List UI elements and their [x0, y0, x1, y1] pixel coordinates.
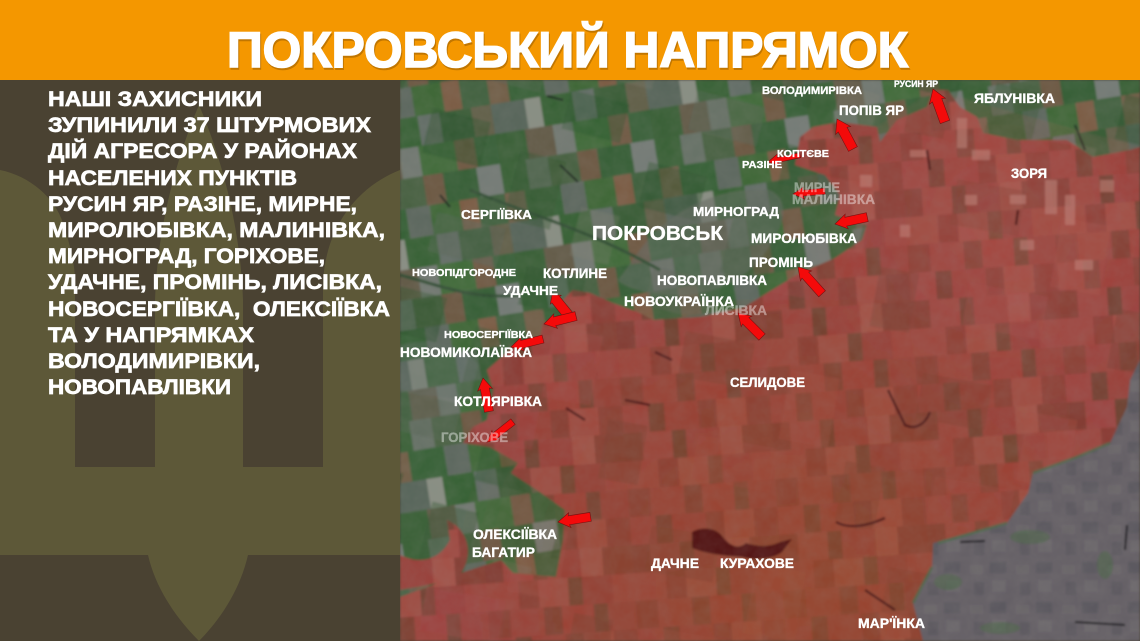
map: green fringe of urban area: [913, 443, 1110, 603]
map noise texture: [400, 80, 1140, 641]
text block: report: МИРОЛЮБІВКА, МАЛИНІВКА,: [48, 219, 385, 242]
map labels: settlements: НОВОПІДГОРОДНЕ: [412, 267, 516, 279]
map labels: settlements: РУСИН ЯР: [894, 79, 938, 89]
text block: report: РУСИН ЯР, РАЗІНЕ, МИРНЕ,: [48, 193, 357, 216]
map labels: settlements: ПОПІВ ЯР: [839, 103, 904, 118]
text block: report: ЗУПИНИЛИ 37 ШТУРМОВИХ: [48, 114, 371, 137]
map: Kurakhove reservoir: [692, 529, 792, 559]
left panel background: [0, 80, 400, 641]
arrow: Novoserhiivka: [509, 332, 545, 354]
arrow: Kotliarivka: [476, 377, 496, 413]
map labels: settlements: ДАЧНЕ: [651, 556, 699, 571]
map labels: settlements: НОВОПАВЛІВКА: [657, 273, 767, 288]
text block: report: НАШІ ЗАХИСНИКИ: [48, 88, 262, 111]
map labels: settlements: ПРОМІНЬ: [749, 255, 813, 270]
map labels: settlements: ЗОРЯ: [1011, 166, 1047, 181]
map: Pokrovsk urban area: [618, 189, 783, 296]
arrow: Myroliubivka: [833, 210, 869, 231]
map shade overlay: [400, 80, 1140, 641]
arrow: Rusyn Yar: [925, 86, 953, 125]
map: ravines in red zone: [566, 150, 1018, 610]
map labels: settlements: МИРНЕ: [794, 180, 840, 195]
arrow: Udachne: [547, 291, 574, 320]
text block: report: МИРНОГРАД, ГОРІХОВЕ,: [48, 245, 325, 268]
map labels: settlements: ЛИСІВКА: [705, 303, 767, 318]
icon: trident emblem: [0, 105, 400, 641]
map labels: settlements: КОТЛЯРІВКА: [454, 394, 542, 409]
map labels: settlements: КОПТЄВЕ: [777, 148, 829, 160]
map: occupied territory: [400, 90, 1140, 641]
map labels: settlements: КУРАХОВЕ: [720, 556, 794, 571]
map base: farmland: [400, 80, 1140, 641]
text block: report: НАСЕЛЕНИХ ПУНКТІВ: [48, 167, 297, 190]
map labels: settlements: СЕРГІЇВКА: [461, 207, 532, 222]
map labels: settlements: ЯБЛУНІВКА: [974, 91, 1055, 106]
map labels: settlements: ВОЛОДИМИРІВКА: [762, 85, 862, 97]
text block: report: [48, 88, 390, 399]
map labels: settlements: НОВОСЕРГІЇВКА: [444, 328, 533, 341]
map: ravines and roads: [400, 96, 1085, 296]
map labels: settlements: НОВОМИКОЛАЇВКА: [400, 345, 532, 360]
arrow: Myrne: [792, 185, 825, 200]
text block: report: НОВОПАВЛІВКИ: [48, 376, 231, 399]
arrow: Lysivka: [733, 308, 767, 342]
arrows: enemy assault directions: [476, 86, 953, 529]
map labels: settlements: [400, 79, 1055, 631]
map: Donetsk urban area: [913, 360, 1140, 641]
arrow: Udachne south: [542, 309, 578, 331]
map labels: settlements: МАР'ЇНКА: [858, 616, 925, 631]
map labels: settlements: НОВОУКРАЇНКА: [624, 294, 734, 309]
map: light fields north-east: [860, 118, 1114, 270]
title: ПОКРОВСЬКИЙ НАПРЯМОК: [228, 23, 909, 80]
text block: report: ТА У НАПРЯМКАХ: [48, 324, 254, 347]
arrow: Popiv Yar: [829, 115, 860, 153]
map labels: settlements: МИРНОГРАД: [693, 204, 780, 219]
map labels: settlements: МАЛИНІВКА: [792, 192, 875, 207]
text block: report: ДІЙ АГРЕСОРА У РАЙОНАХ: [48, 139, 357, 163]
map labels: settlements: РАЗІНЕ: [742, 159, 782, 171]
map labels: settlements: ОЛЕКСІЇВКА: [473, 527, 557, 542]
map labels: settlements: БАГАТИР: [472, 545, 535, 560]
map labels: settlements: СЕЛИДОВЕ: [730, 375, 805, 390]
title: ПОКРОВСЬКИЙ НАПРЯМОК: [227, 21, 908, 78]
map labels: settlements: УДАЧНЕ: [503, 284, 558, 298]
map: satellite view: [400, 80, 1140, 641]
arrow: Razine: [767, 149, 802, 168]
text block: report: ВОЛОДИМИРІВКИ,: [48, 350, 260, 373]
map: tonal overlays on red zone: [828, 96, 1138, 352]
text block: report: НОВОСЕРГІЇВКА, ОЛЕКСІЇВКА: [48, 298, 390, 321]
map labels: settlements: ГОРІХОВЕ: [441, 430, 508, 445]
arrow: Promin: [792, 262, 828, 299]
map labels: settlements: КОТЛИНЕ: [543, 266, 607, 281]
text block: report: УДАЧНЕ, ПРОМІНЬ, ЛИСІВКА,: [48, 271, 382, 294]
map labels: settlements: МИРОЛЮБІВКА: [751, 231, 857, 246]
arrow: Oleksiivka: [557, 509, 592, 529]
map: west red tendril: [400, 520, 468, 590]
arrow: Horikhove: [483, 417, 517, 447]
map labels: settlements: ПОКРОВСЬК: [592, 223, 724, 245]
title bar: [0, 0, 1140, 80]
